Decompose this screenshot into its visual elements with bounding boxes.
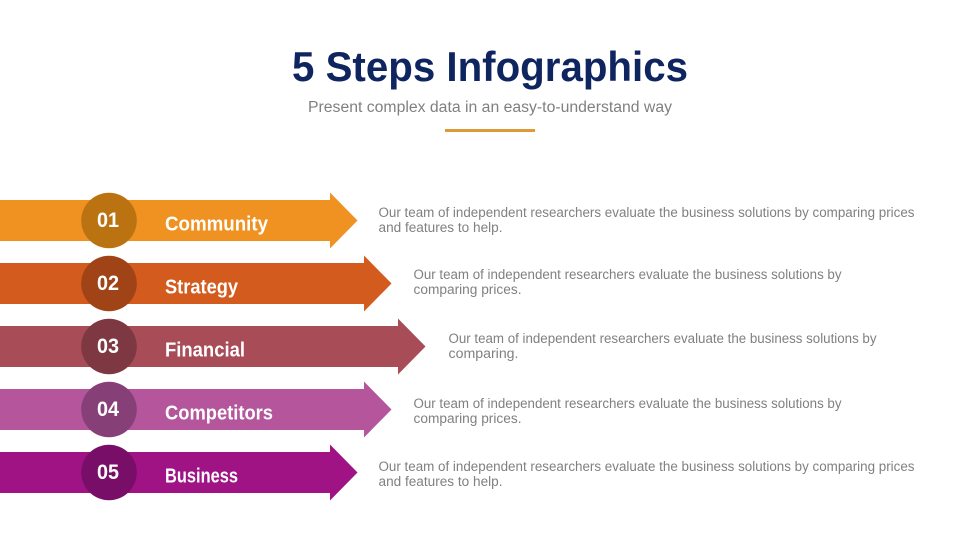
number badge 05 (81, 445, 137, 500)
number badge 02 (81, 256, 137, 311)
step 5 (0, 444, 915, 500)
number badge 05: 05 (97, 461, 119, 484)
description 2 (414, 267, 842, 297)
number badge 04 (81, 382, 137, 437)
number badge 01 (81, 193, 137, 248)
label: Competitors: Competitors (165, 402, 273, 424)
number badge 03: 03 (97, 335, 119, 358)
number badge 01: 01 (97, 209, 119, 232)
number badge 04: 04 (97, 398, 119, 421)
description 2: comparing prices. (414, 282, 522, 297)
description 1: and features to help. (378, 220, 502, 235)
description 5: and features to help. (378, 474, 502, 489)
description 1: Our team of independent researchers evaluate the business solutions by comparing prices (378, 205, 915, 220)
description 1 (378, 205, 915, 235)
subtitle: Present complex data in an easy-to-understand way (308, 99, 672, 116)
arrow 3 (0, 318, 426, 374)
description 3: Our team of independent researchers evaluate the business solutions by (448, 331, 877, 346)
description 4: comparing prices. (414, 411, 522, 426)
label: Financial: Financial (165, 340, 245, 362)
label: Business: Business (165, 466, 238, 488)
arrow 2 (0, 256, 392, 312)
description 5 (378, 459, 915, 489)
step 4 (0, 382, 842, 438)
arrow 5 (0, 444, 358, 500)
label: Community: Community (165, 214, 269, 236)
accent rule (445, 129, 535, 132)
arrow 1 (0, 192, 358, 248)
description 5: Our team of independent researchers evaluate the business solutions by comparing prices (378, 459, 915, 474)
number badge 03 (81, 319, 137, 374)
arrow 4 (0, 382, 392, 438)
description 3 (448, 331, 877, 361)
step 3 (0, 318, 877, 374)
title: 5 Steps Infographics (292, 43, 688, 90)
description 4 (414, 396, 842, 426)
step 2 (0, 256, 842, 312)
description 3: comparing. (448, 346, 518, 361)
description 4: Our team of independent researchers evaluate the business solutions by (414, 396, 842, 411)
label: Strategy: Strategy (165, 276, 239, 298)
number badge 02: 02 (97, 272, 119, 295)
step 1 (0, 192, 915, 248)
description 2: Our team of independent researchers evaluate the business solutions by (414, 267, 842, 282)
